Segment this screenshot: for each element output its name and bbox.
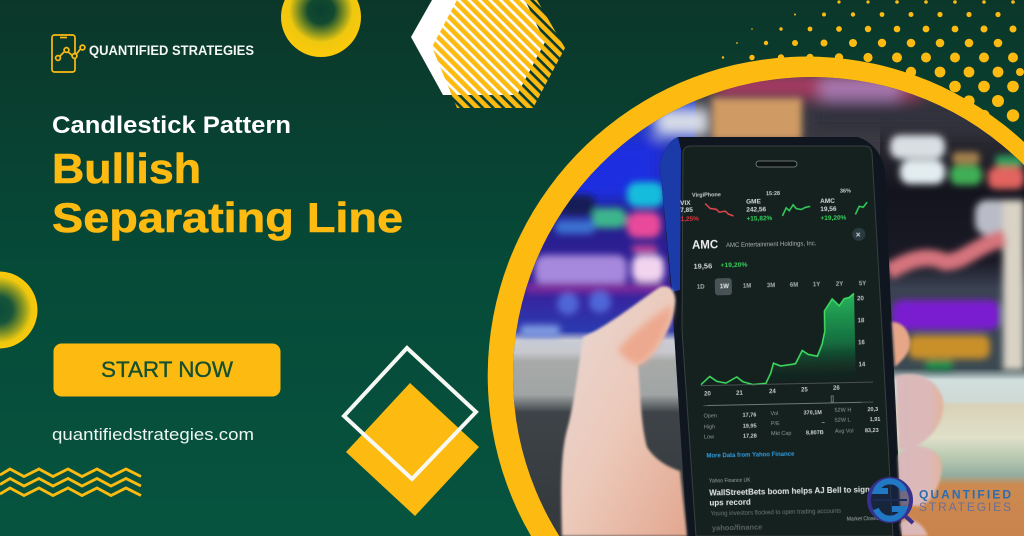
- white outline diamond: [344, 348, 476, 479]
- chart axis labels: 16: [858, 340, 865, 346]
- tickers: +15,82%: [746, 215, 773, 223]
- button: start now: [54, 344, 280, 396]
- statistics table: 52W L: [835, 418, 851, 424]
- statistics table: Open: [704, 413, 717, 420]
- chart axis labels: 14: [858, 362, 866, 368]
- news summary: Young investors flocked to open trading accounts: [711, 509, 841, 517]
- icon: phone with chart: [52, 35, 85, 72]
- chart axis labels: 24: [769, 389, 776, 395]
- blurred trading screens: [505, 70, 1024, 536]
- sparklines: [704, 202, 868, 217]
- tickers: 19,56: [820, 206, 837, 213]
- tickers: AMC: [820, 198, 835, 205]
- title line: Separating Line: Separating Line: [52, 194, 403, 241]
- stock name: AMC: [692, 239, 718, 252]
- logo: Quantified Strategies watermark: STRATEGIES: [919, 500, 1011, 514]
- fingers: [892, 322, 943, 536]
- chart axis labels: [702, 296, 866, 398]
- statistics table: 17,28: [743, 434, 757, 440]
- close button: ×: [856, 230, 861, 239]
- phone: [660, 137, 902, 536]
- chart axis labels: 26: [833, 386, 840, 392]
- screen content: +19,20%: [720, 262, 748, 269]
- statistics table: 8,807B: [806, 430, 824, 436]
- price chart: [699, 293, 873, 406]
- range tabs: 1W: [720, 284, 729, 290]
- statistics table: Avg Vol: [835, 428, 854, 435]
- statistics table: High: [704, 424, 715, 431]
- phone case: [660, 137, 902, 536]
- tickers: [680, 198, 846, 222]
- tickers: 242,56: [746, 206, 767, 214]
- chart axis labels: 20: [704, 391, 712, 398]
- screen content: [680, 188, 883, 533]
- statistics table: 52W H: [834, 408, 851, 414]
- title line: Bullish: Bullish: [52, 145, 201, 192]
- statistics table: 20,3: [867, 407, 878, 413]
- statistics table: 1,91: [870, 417, 880, 423]
- range tabs: 6M: [790, 283, 798, 289]
- statistics table: Mkt Cap: [771, 431, 792, 437]
- heading: Candlestick Pattern: Candlestick Pattern: [52, 112, 291, 139]
- chart axis labels: 25: [801, 387, 808, 394]
- decorative halftone circle top: [281, 0, 361, 57]
- website url: quantifiedstrategies.com: [52, 425, 254, 444]
- yahoo finance link: More Data from Yahoo Finance: [706, 452, 795, 460]
- decorative halftone circle left: [0, 272, 38, 348]
- tickers: +19,20%: [820, 215, 847, 222]
- zigzag lines: [0, 469, 141, 496]
- striped hexagon: [411, 0, 565, 108]
- status bar: VirgiPhone: [692, 192, 721, 199]
- tickers: 7,85: [680, 207, 693, 214]
- logo emblem: [869, 479, 913, 523]
- range tabs: 1Y: [813, 282, 820, 288]
- logo: Quantified Strategies header: [52, 35, 254, 72]
- speaker: [756, 161, 797, 167]
- statistics table: 370,1M: [803, 410, 822, 417]
- watermark text: QUANTIFIED: [919, 488, 1011, 502]
- news source: Yahoo Finance UK: [709, 478, 751, 485]
- logo: Quantified Strategies watermark: [869, 479, 1011, 523]
- screen content: AMC Entertainment Holdings, Inc.: [726, 241, 817, 249]
- statistics table: 19,95: [743, 424, 757, 430]
- statistics table: –: [822, 420, 825, 426]
- blue side of case: [660, 137, 681, 292]
- status bar: 36%: [840, 188, 851, 195]
- close button: [852, 228, 865, 241]
- logo wordmark: QUANTIFIED STRATEGIES: [89, 43, 254, 58]
- statistics table: [703, 407, 881, 441]
- range tabs: 2Y: [836, 282, 843, 288]
- thumb shading: [618, 305, 672, 365]
- statistics table: Low: [704, 434, 714, 441]
- statistics table: P/E: [771, 421, 780, 427]
- status bar: [692, 188, 851, 199]
- yellow ring: [488, 57, 1024, 536]
- button: start now: START NOW: [101, 357, 234, 382]
- hand and thumb: [561, 286, 687, 536]
- phone screen: [682, 146, 893, 536]
- chart axis labels: 20: [857, 296, 865, 302]
- screen content: ups record: [709, 498, 751, 508]
- statistics table: Vol: [770, 411, 778, 417]
- chart axis labels: 18: [858, 318, 865, 324]
- tickers: GME: [746, 198, 762, 206]
- chart axis labels: 21: [736, 391, 744, 397]
- range tabs: [697, 278, 866, 296]
- tickers: VIX: [680, 200, 691, 207]
- status bar: 15:28: [766, 191, 780, 197]
- statistics table: 17,76: [743, 413, 756, 419]
- range tabs: 5Y: [859, 281, 866, 287]
- range tabs: 1D: [697, 285, 705, 291]
- yahoo finance brand: yahoo/finance: [712, 522, 762, 532]
- statistics table: 83,23: [865, 428, 879, 434]
- range tabs: 3M: [767, 283, 775, 289]
- halftone dot field: [722, 0, 1024, 150]
- price: 19,56: [693, 261, 712, 271]
- photo: hand holding phone: [505, 70, 1024, 536]
- yellow diamond: [346, 383, 479, 516]
- news headline: WallStreetBets boom helps AJ Bell to sign-: [709, 485, 873, 498]
- tickers: 1,25%: [680, 216, 699, 223]
- market status: Market Closed: [847, 516, 879, 523]
- range tabs: 1M: [743, 284, 751, 290]
